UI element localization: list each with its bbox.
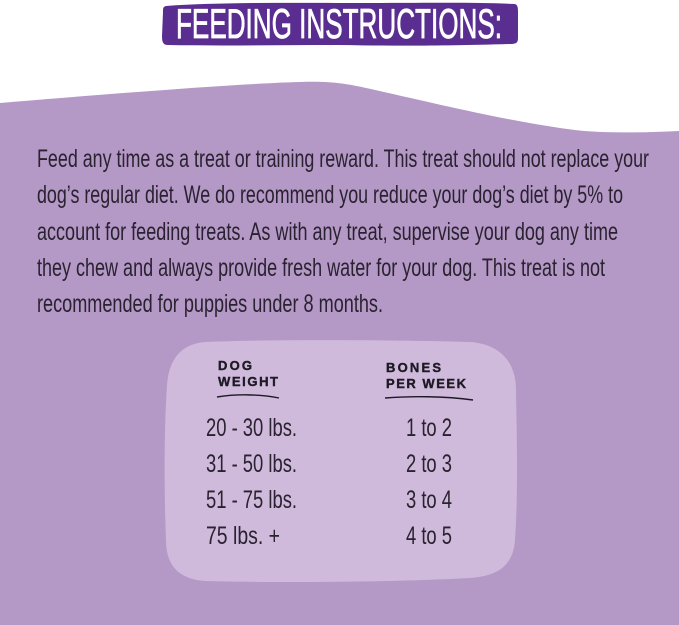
banner shape — [162, 3, 518, 46]
feeding table panel — [165, 340, 517, 582]
column heading: bones per week: PER WEEK — [386, 376, 467, 391]
dog weight values: 51 - 75 lbs. — [206, 486, 297, 514]
bones per week values: 3 to 4 — [406, 486, 452, 514]
column heading: dog weight — [217, 358, 279, 398]
table background — [165, 340, 517, 582]
bones per week values: 1 to 2 — [406, 414, 452, 442]
dog weight values: 31 - 50 lbs. — [206, 450, 297, 478]
bones per week values — [406, 414, 452, 550]
dog weight values — [206, 414, 297, 550]
column heading: dog weight: DOG — [218, 358, 252, 373]
feeding instructions paragraph: recommended for puppies under 8 months. — [37, 290, 383, 318]
column heading: bones per week: BONES — [386, 360, 441, 375]
dog weight values: 20 - 30 lbs. — [206, 414, 297, 442]
column heading: dog weight: WEIGHT — [218, 374, 278, 389]
title banner — [162, 0, 518, 47]
feeding instructions paragraph — [37, 145, 649, 318]
bones per week values: 2 to 3 — [406, 450, 452, 478]
dog weight values: 75 lbs. + — [206, 522, 280, 550]
bones per week values: 4 to 5 — [406, 522, 452, 550]
column heading: bones per week — [385, 360, 473, 400]
